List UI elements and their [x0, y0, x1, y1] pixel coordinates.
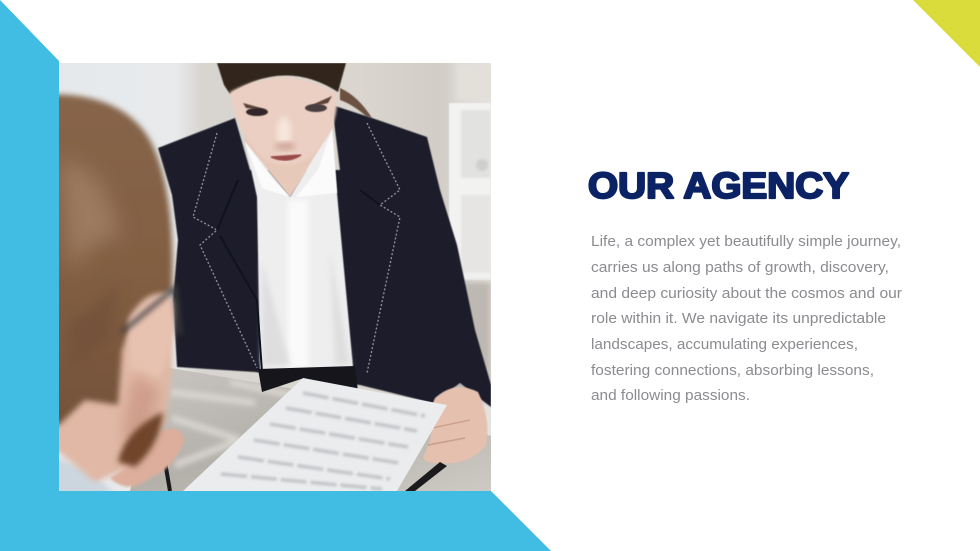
shirt shading — [262, 250, 350, 365]
mouth — [271, 155, 301, 160]
shirt — [59, 458, 112, 491]
photo: interview across a desk — [59, 63, 491, 491]
body paragraph — [591, 233, 902, 404]
collar — [245, 128, 337, 197]
ponytail — [340, 88, 372, 118]
eyebrows — [243, 96, 332, 110]
dark trousers — [258, 366, 358, 392]
eyes — [246, 108, 268, 116]
body paragraph: and following passions. — [591, 387, 750, 404]
photo: desk surface — [130, 367, 491, 491]
jacket — [158, 105, 491, 407]
corner shape: yellow triangle — [913, 0, 980, 67]
body paragraph: fostering connections, absorbing lessons, — [591, 362, 874, 379]
body paragraph: Life, a complex yet beautifully simple journey, — [591, 233, 901, 250]
glasses arm — [122, 288, 180, 335]
shirt placket — [289, 202, 307, 366]
body paragraph: landscapes, accumulating experiences, — [591, 336, 858, 353]
face — [230, 77, 337, 165]
body paragraph: carries us along paths of growth, discovery, — [591, 259, 889, 276]
nose — [277, 117, 291, 147]
hair — [217, 63, 346, 94]
body paragraph: role within it. We navigate its unpredictable — [591, 310, 886, 327]
beard — [118, 412, 163, 467]
neck and chest — [245, 126, 333, 197]
background shape: blue frame — [0, 0, 551, 551]
body paragraph: and deep curiosity about the cosmos and our — [591, 285, 902, 302]
hair — [59, 90, 176, 428]
hand — [110, 429, 184, 486]
jacket lapels — [193, 123, 400, 373]
ear — [128, 293, 174, 378]
photo: woman — [158, 63, 491, 463]
photo: paper form — [165, 378, 447, 491]
skin: neck and cheek — [59, 300, 176, 484]
shirt — [245, 128, 353, 370]
woman's hand — [423, 387, 487, 463]
photo background: office wall and shelf — [59, 63, 491, 491]
title: OUR AGENCY — [588, 165, 849, 206]
photo: blurred man in foreground — [59, 90, 184, 491]
